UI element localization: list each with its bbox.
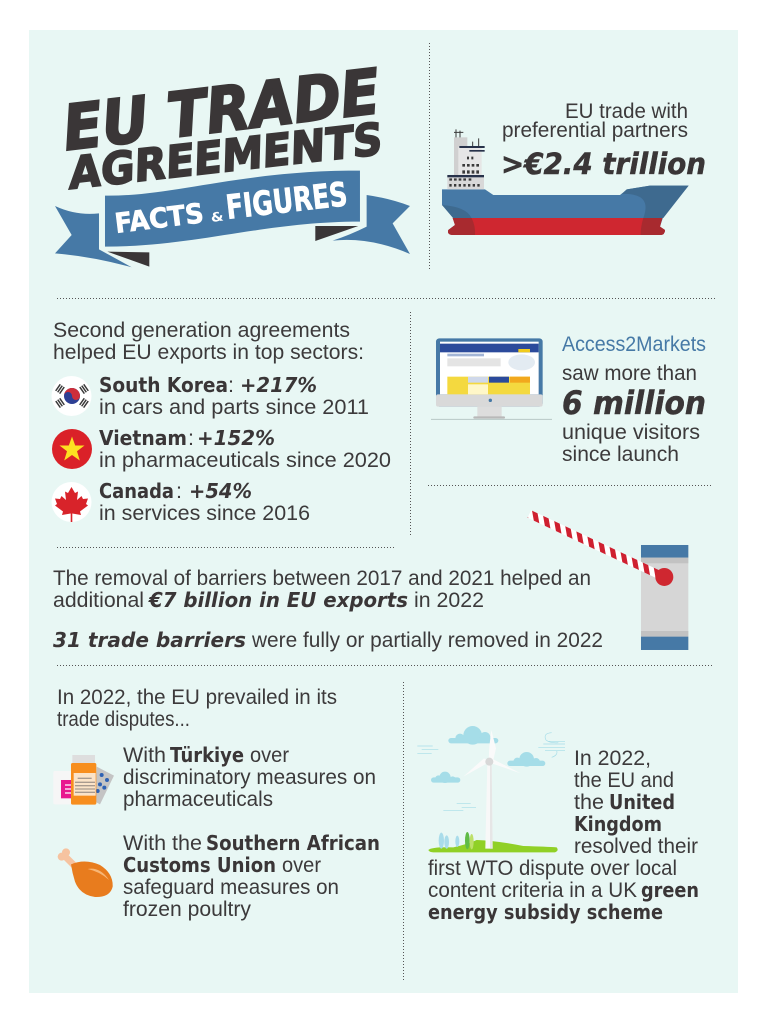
- exports heading: [53, 318, 364, 364]
- icon: computer monitor showing website: [431, 338, 552, 419]
- icon: Canada flag: [52, 482, 92, 522]
- text: SACU dispute: frozen poultry: [123, 897, 251, 921]
- text: UK dispute: content criteria in a UK: [428, 878, 638, 902]
- text: UK dispute: Kingdom: [574, 812, 662, 836]
- trade value text: preferential partners: [502, 118, 688, 142]
- text: UK dispute: United: [609, 790, 675, 814]
- barriers text: 31 trade barriers: [53, 628, 246, 652]
- barriers text: €7 billion in EU exports: [148, 588, 408, 612]
- text: SACU dispute: safeguard measures on: [123, 875, 339, 899]
- text: SACU dispute: Southern African: [206, 831, 380, 855]
- text: UK dispute: the: [574, 790, 604, 814]
- text: Vietnam: +152%: [197, 426, 275, 450]
- Access2Markets text: [562, 332, 706, 466]
- icon: chicken leg: [58, 848, 113, 897]
- text: South Korea: :: [228, 373, 234, 397]
- text: South Korea: +217%: [240, 373, 317, 397]
- text: South Korea: [99, 373, 369, 419]
- barriers text: The removal of barriers between 2017 and 2021 helped an: [53, 566, 591, 590]
- exports heading: Second generation agreements: [53, 318, 350, 342]
- text: Turkiye dispute: pharmaceuticals: [123, 787, 273, 811]
- text: UK dispute: energy subsidy scheme: [428, 900, 663, 924]
- ribbon text: &: [210, 209, 224, 225]
- text: Canada: in services since 2016: [99, 501, 310, 525]
- barriers text: were fully or partially removed in 2022: [251, 628, 603, 652]
- text: UK dispute: first WTO dispute over local: [428, 856, 677, 880]
- Access2Markets text: saw more than: [562, 361, 697, 385]
- title: EU Trade Agreements: EU TRADE: [59, 55, 384, 165]
- barriers text: [53, 566, 603, 652]
- text: UK dispute: [428, 746, 699, 924]
- icon: ship: [442, 129, 689, 235]
- ribbon text: FIGURES: [224, 174, 349, 227]
- trade value text: EU trade with: [565, 99, 688, 123]
- text: Vietnam: :: [188, 426, 194, 450]
- disputes heading: In 2022, the EU prevailed in its: [57, 685, 337, 709]
- text: Vietnam: [99, 426, 391, 472]
- disputes heading: trade disputes...: [57, 707, 190, 731]
- text: South Korea: South Korea: [99, 373, 228, 397]
- ribbon text: [113, 174, 349, 240]
- icon: South Korea flag: [52, 376, 92, 416]
- trade value text: [501, 99, 706, 181]
- text: SACU dispute: over: [282, 853, 321, 877]
- text: Vietnam: in pharmaceuticals since 2020: [99, 448, 391, 472]
- barriers text: additional: [53, 588, 144, 612]
- text: UK dispute: the EU and: [574, 768, 674, 792]
- text: Turkiye dispute: over: [250, 743, 289, 767]
- icon: pharmaceuticals: [53, 755, 114, 805]
- title: EU Trade Agreements: [59, 55, 384, 200]
- ribbon banner: Facts & Figures: [55, 171, 410, 267]
- text: Turkiye dispute: Türkiye: [170, 743, 244, 767]
- text: South Korea: in cars and parts since 2011: [99, 395, 369, 419]
- disputes heading: [57, 685, 337, 731]
- ribbon text: FACTS: [113, 198, 206, 240]
- text: Turkiye dispute: [123, 743, 376, 811]
- icon: wind turbine landscape: [417, 726, 565, 852]
- text: Canada: +54%: [189, 479, 252, 503]
- text: Vietnam: Vietnam: [99, 426, 187, 450]
- icon: Vietnam flag: [52, 429, 92, 469]
- Access2Markets text: 6 million: [562, 384, 706, 422]
- title block: [55, 55, 410, 267]
- text: SACU dispute: Customs Union: [123, 853, 276, 877]
- text: UK dispute: In 2022,: [574, 746, 651, 770]
- text: Canada: [99, 479, 310, 525]
- text: Turkiye dispute: With: [123, 743, 166, 767]
- text: SACU dispute: With the: [123, 831, 202, 855]
- Access2Markets text: Access2Markets: [562, 332, 706, 356]
- Access2Markets text: unique visitors: [562, 420, 700, 444]
- text: UK dispute: resolved their: [574, 834, 698, 858]
- barriers text: in 2022: [414, 588, 484, 612]
- text: Turkiye dispute: discriminatory measures on: [123, 765, 376, 789]
- text: SACU dispute: [123, 831, 380, 921]
- text: Canada: :: [176, 479, 182, 503]
- Access2Markets text: since launch: [562, 442, 679, 466]
- text: Canada: Canada: [99, 479, 174, 503]
- text: UK dispute: green: [641, 878, 699, 902]
- exports heading: helped EU exports in top sectors:: [53, 340, 364, 364]
- icon: barrier gate: [529, 514, 688, 650]
- title: EU Trade Agreements: AGREEMENTS: [69, 114, 383, 200]
- trade value text: >€2.4 trillion: [501, 147, 706, 181]
